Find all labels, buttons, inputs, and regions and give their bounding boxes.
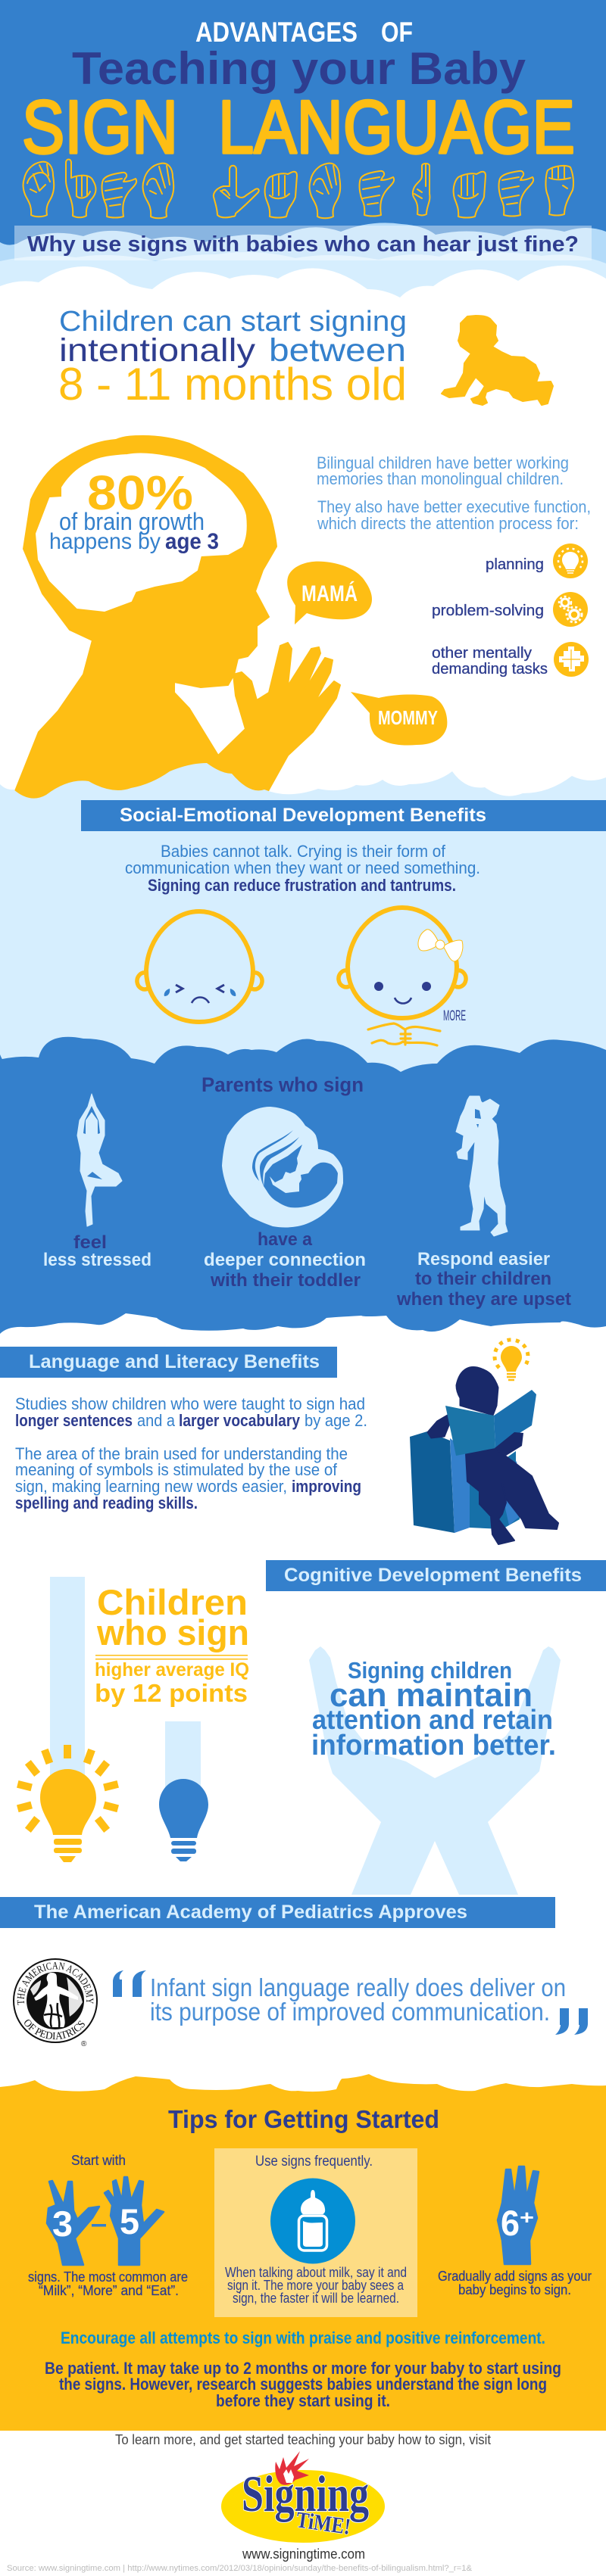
text block: language benefits: sign, making learning new words easier, bbox=[15, 1477, 287, 1496]
label: respond easier bbox=[396, 1249, 571, 1310]
text block: signing age: 8 - 11 months old bbox=[58, 359, 407, 410]
quote text: Infant sign language really does deliver on bbox=[150, 1973, 566, 2001]
icon: academy seal: OF PEDIATRICS bbox=[24, 2020, 85, 2039]
label: less stressed: feel bbox=[73, 1232, 107, 1253]
tip: gradually add signs: Gradually add signs as your bbox=[438, 2269, 592, 2284]
label: respond easier: when they are upset bbox=[396, 1289, 571, 1310]
heading: language and literacy bbox=[0, 1347, 337, 1378]
title: OF bbox=[381, 17, 413, 48]
text block: attention bbox=[311, 1657, 556, 1761]
icon: yoga figure bbox=[77, 1094, 122, 1226]
label: respond easier: Respond easier bbox=[417, 1249, 550, 1269]
panel: parents who sign bbox=[0, 1037, 606, 1334]
stat: 80% of brain growth: of brain growth bbox=[59, 508, 205, 535]
icon: happy baby signing more bbox=[339, 908, 466, 1045]
icon: hand six plus bbox=[498, 2166, 539, 2264]
title: Teaching your Baby bbox=[72, 43, 526, 94]
icon: academy seal bbox=[13, 1958, 98, 2048]
icon: crying baby bbox=[137, 911, 262, 1022]
list: planning: planning bbox=[486, 556, 544, 573]
logo: signing time: TiME! bbox=[295, 2507, 352, 2540]
panel: tips bbox=[0, 2074, 606, 2431]
text block: language benefits: spelling and reading skills. bbox=[15, 1494, 198, 1512]
header panel bbox=[0, 0, 606, 326]
stat: 80% of brain growth: 80% bbox=[87, 466, 193, 520]
quote text bbox=[150, 1973, 566, 2026]
text block: bilingual children: which directs the attention process for: bbox=[317, 514, 579, 533]
heading: language and literacy: Language and Literacy Benefits bbox=[29, 1351, 320, 1372]
text block: bilingual children bbox=[317, 453, 591, 533]
sign hands bbox=[368, 1023, 440, 1045]
text block: language benefits: and a bbox=[137, 1411, 176, 1430]
speech bubble: mama bbox=[287, 562, 372, 625]
list: other tasks bbox=[432, 642, 589, 677]
tip: gradually add signs: 6 bbox=[501, 2203, 520, 2243]
icon: idea bulb bbox=[495, 1340, 528, 1380]
stat: 80% of brain growth: happens by bbox=[49, 529, 161, 554]
speech bubble: mommy: MOMMY bbox=[378, 706, 438, 729]
logo: signing time bbox=[221, 2451, 385, 2543]
heading: academy of pediatrics: The American Academy of Pediatrics Approves bbox=[34, 1902, 467, 1923]
text block: language benefits: improving bbox=[292, 1477, 361, 1496]
bow bbox=[418, 930, 463, 961]
heading: academy of pediatrics bbox=[0, 1897, 555, 1928]
tip panel: use signs frequently: When talking about milk, say it and bbox=[225, 2265, 407, 2280]
text block: signing age: intentionally bbox=[59, 332, 256, 369]
text block: website: www.signingtime.com bbox=[242, 2546, 365, 2562]
text block: be patient: before they start using it. bbox=[216, 2391, 390, 2410]
question band: Why use signs with babies who can hear just fine? bbox=[27, 232, 579, 257]
brain shape bbox=[36, 454, 246, 611]
text block: babies cannot talk: Signing can reduce frustration and tantrums. bbox=[148, 876, 456, 895]
icon: academy seal: ® bbox=[81, 2040, 87, 2048]
title: ADVANTAGES bbox=[195, 17, 358, 48]
label: deeper connection: with their toddler bbox=[210, 1270, 361, 1291]
tip: start with signs: 3 bbox=[52, 2204, 73, 2244]
tip: start with signs: 5 bbox=[120, 2201, 139, 2241]
stat: 80% of brain growth bbox=[49, 466, 219, 554]
list: other tasks: other mentally bbox=[432, 645, 532, 662]
icon: blue bulb bbox=[159, 1779, 208, 1861]
heading: cognitive development: Cognitive Development Benefits bbox=[284, 1565, 582, 1586]
text block: source: Source: www.signingtime.com | http://www.nytimes.com/2012/03/18/opinion/sunday/the-benefits-of-bilingualism.html?_r=1& bbox=[7, 2564, 473, 2573]
label: respond easier: to their children bbox=[415, 1269, 551, 1289]
icon: close quote bbox=[555, 2008, 588, 2035]
title bbox=[22, 17, 575, 169]
stat: higher IQ: who sign bbox=[96, 1612, 249, 1652]
text block: language benefits: longer sentences bbox=[15, 1411, 133, 1430]
text block: babies cannot talk: Babies cannot talk. Crying is their form of bbox=[161, 842, 446, 861]
text block: language benefits: by age 2. bbox=[305, 1411, 367, 1430]
heading: cognitive development bbox=[266, 1560, 606, 1591]
list: other tasks: demanding tasks bbox=[432, 661, 548, 677]
panel: social-emotional background bbox=[0, 763, 606, 1075]
label: deeper connection: deeper connection bbox=[204, 1250, 366, 1270]
icon: hand five bbox=[105, 2177, 164, 2265]
label: deeper connection bbox=[204, 1229, 366, 1291]
question band bbox=[14, 226, 592, 260]
text block: language benefits bbox=[15, 1394, 367, 1512]
text block: encouragement: Encourage all attempts to sign with praise and positive reinforcement. bbox=[61, 2328, 545, 2347]
text block: signing age: between bbox=[269, 332, 406, 369]
stat: higher IQ: by 12 points bbox=[95, 1679, 248, 1707]
text block: signing age bbox=[58, 306, 407, 410]
illustration: child reading on chair bbox=[410, 1340, 558, 1544]
stat: 80% of brain growth: age 3 bbox=[165, 529, 219, 554]
text block: babies cannot talk bbox=[125, 842, 480, 895]
tip: gradually add signs: baby begins to sign. bbox=[458, 2282, 571, 2297]
title: SIGN bbox=[22, 85, 178, 169]
text block: babies cannot talk: communication when they want or need something. bbox=[125, 858, 480, 877]
text block: language benefits: Studies show children who were taught to sign had bbox=[15, 1394, 365, 1413]
tip panel: use signs frequently bbox=[214, 2148, 417, 2317]
icon: parent holding child bbox=[456, 1096, 508, 1236]
stat: higher IQ bbox=[95, 1582, 249, 1707]
icon: milk bottle bbox=[270, 2179, 355, 2263]
icon: mother and baby bbox=[222, 1107, 343, 1228]
list: problem-solving bbox=[432, 592, 588, 627]
quote text: its purpose of improved communication. bbox=[150, 1998, 550, 2026]
illustration: head silhouette with hand bbox=[8, 436, 340, 810]
tip: gradually add signs bbox=[438, 2166, 592, 2297]
text block: learn more: To learn more, and get started teaching your baby how to sign, visit bbox=[115, 2432, 491, 2447]
stat: higher IQ: Children bbox=[97, 1582, 248, 1622]
tip panel: use signs frequently: sign, the faster it will be learned. bbox=[233, 2291, 399, 2306]
icon: open quote bbox=[113, 1970, 146, 1997]
heading: social-emotional: Social-Emotional Development Benefits bbox=[120, 805, 486, 826]
text block: attention: attention and retain bbox=[312, 1704, 553, 1735]
text block: language benefits: larger vocabulary bbox=[179, 1411, 301, 1430]
tip: gradually add signs: + bbox=[520, 2206, 534, 2229]
tip panel: use signs frequently: sign it. The more your baby sees a bbox=[227, 2278, 405, 2293]
list: planning bbox=[486, 544, 588, 578]
label: less stressed bbox=[43, 1232, 152, 1270]
illustration: crossed hands bbox=[309, 1646, 561, 1895]
label: less stressed: less stressed bbox=[43, 1250, 152, 1270]
text block: attention: can maintain bbox=[330, 1677, 533, 1714]
label: deeper connection: have a bbox=[258, 1229, 313, 1250]
logo: signing time: Signing bbox=[242, 2465, 369, 2522]
stat: higher IQ: higher average IQ bbox=[95, 1659, 249, 1680]
tip: start with signs: signs. The most common are bbox=[28, 2269, 188, 2285]
icon: happy baby signing more: MORE bbox=[443, 1008, 466, 1024]
text block: attention: Signing children bbox=[348, 1657, 512, 1684]
tip panel: use signs frequently: Use signs frequently. bbox=[255, 2154, 373, 2170]
text block: language benefits: The area of the brain used for understanding the bbox=[15, 1444, 348, 1463]
text block: bilingual children: Bilingual children have better working bbox=[317, 453, 569, 472]
text block: be patient bbox=[45, 2359, 561, 2410]
icon: crawling baby bbox=[442, 316, 553, 405]
list: problem-solving: problem-solving bbox=[432, 603, 544, 619]
tip: start with signs: “Milk”, “More” and “Eat”. bbox=[39, 2283, 179, 2298]
heading: parents who sign: Parents who sign bbox=[201, 1073, 364, 1096]
icon: row of fingerspelling hands bbox=[23, 159, 573, 218]
text block: signing age: Children can start signing bbox=[59, 306, 407, 338]
speech bubble: mama: MAMÁ bbox=[301, 581, 358, 606]
icon: yellow bulb bbox=[17, 1745, 119, 1862]
tip: start with signs: Start with bbox=[71, 2153, 126, 2168]
heading: social-emotional bbox=[81, 800, 606, 831]
heading: tips: Tips for Getting Started bbox=[168, 2105, 439, 2133]
tip: start with signs bbox=[28, 2153, 188, 2298]
text block: attention: information better. bbox=[311, 1730, 556, 1761]
chart: IQ bulb bars bbox=[17, 1577, 208, 1862]
text block: bilingual children: memories than monolingual children. bbox=[317, 469, 564, 488]
speech bubble: mommy bbox=[351, 692, 447, 745]
text block: language benefits: meaning of symbols is stimulated by the use of bbox=[15, 1460, 338, 1479]
icon: academy seal: THE AMERICAN ACADEMY bbox=[17, 1962, 94, 2004]
icon: hand three bbox=[47, 2181, 99, 2265]
